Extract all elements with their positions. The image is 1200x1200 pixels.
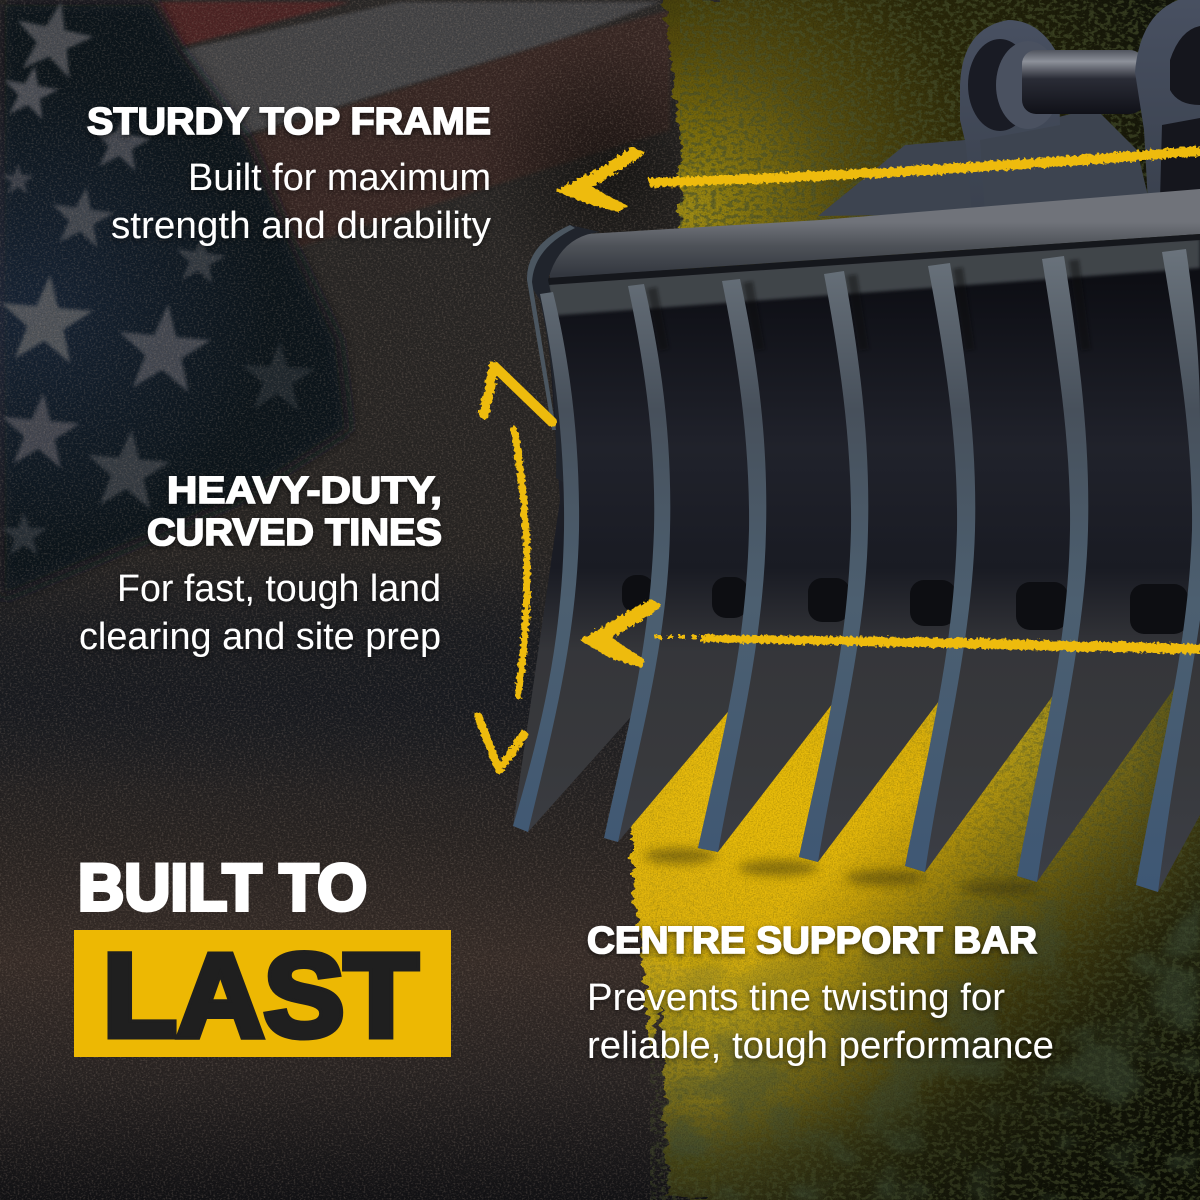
title line one: BUILT TO (78, 850, 367, 924)
flag red stripe top (154, 2, 350, 46)
arrow head bottom (478, 716, 524, 770)
description (79, 568, 441, 658)
yellow rough left edge (632, 0, 740, 1200)
arrow head (555, 147, 645, 212)
tine 7 (1136, 249, 1200, 892)
canton navy glow (0, 70, 270, 550)
arrow: curved tines double arrow (478, 366, 552, 770)
description: Prevents tine twisting for (587, 977, 1005, 1019)
flag stars (0, 0, 317, 555)
callout: curved tines (79, 470, 442, 658)
description: strength and durability (111, 205, 491, 247)
arrow head (580, 599, 662, 668)
heading: STURDY TOP FRAME (87, 101, 491, 143)
tine top shadows (652, 260, 1086, 350)
background: yellow grunge panel (632, 0, 1200, 1200)
bucket inner back plate and lower blades (513, 235, 1200, 892)
bucket side plate (527, 225, 600, 484)
title highlight box (74, 930, 451, 1057)
bucket mounting lugs (818, 0, 1200, 216)
flag grey stripe (182, 2, 660, 137)
arrow shaft (648, 146, 1200, 187)
yellow panel upper fill (720, 0, 1200, 400)
yellow panel lower fill (720, 400, 1200, 1200)
dark lower right corner (640, 640, 1200, 1200)
hinge pin (1022, 50, 1144, 114)
tine 4 (799, 271, 868, 862)
top frame (550, 189, 1200, 278)
background: shaded bands (0, 30, 730, 790)
flag dark red stripe (238, 10, 670, 248)
title line two: LAST (103, 930, 418, 1062)
bucket lit wall (548, 238, 1200, 316)
callout: centre support bar (587, 920, 1054, 1067)
heading: CENTRE SUPPORT BAR (587, 920, 1037, 962)
tine 2 (604, 284, 670, 842)
heading: HEAVY-DUTY, (167, 470, 442, 512)
description: Built for maximum (188, 157, 491, 199)
arrow: centre support bar callout (580, 599, 1200, 668)
description (587, 977, 1054, 1067)
rake bucket (513, 0, 1200, 892)
arrow: top frame callout (555, 146, 1200, 212)
tine 1 (513, 292, 579, 832)
flag blue canton (0, 0, 350, 600)
background: brown grain (0, 0, 690, 1200)
description: clearing and site prep (79, 616, 441, 658)
tine 6 (1017, 256, 1088, 882)
description: reliable, tough performance (587, 1025, 1054, 1067)
tine 3 (698, 279, 766, 852)
heading (147, 470, 442, 554)
mounting gusset (818, 108, 1148, 216)
tine 5 (905, 263, 975, 872)
left mounting lug (960, 20, 1060, 216)
support bar bolts (622, 575, 1188, 634)
arrow head top (484, 366, 552, 422)
right lug recess (1160, 26, 1200, 200)
tines (513, 249, 1200, 892)
arrow shaft (700, 635, 1200, 654)
right mounting lug (1135, 0, 1200, 203)
description: For fast, tough land (117, 568, 441, 610)
title: built to last (74, 850, 451, 1062)
callout: sturdy top frame (87, 101, 491, 247)
heading: CURVED TINES (147, 512, 442, 554)
description (111, 157, 491, 247)
grunge speckle and patches (650, 0, 1200, 1200)
background: American flag (0, 0, 670, 600)
arrow shaft (514, 430, 527, 695)
tine shadows on ground (644, 848, 1040, 896)
left lug bushing (968, 39, 1032, 131)
